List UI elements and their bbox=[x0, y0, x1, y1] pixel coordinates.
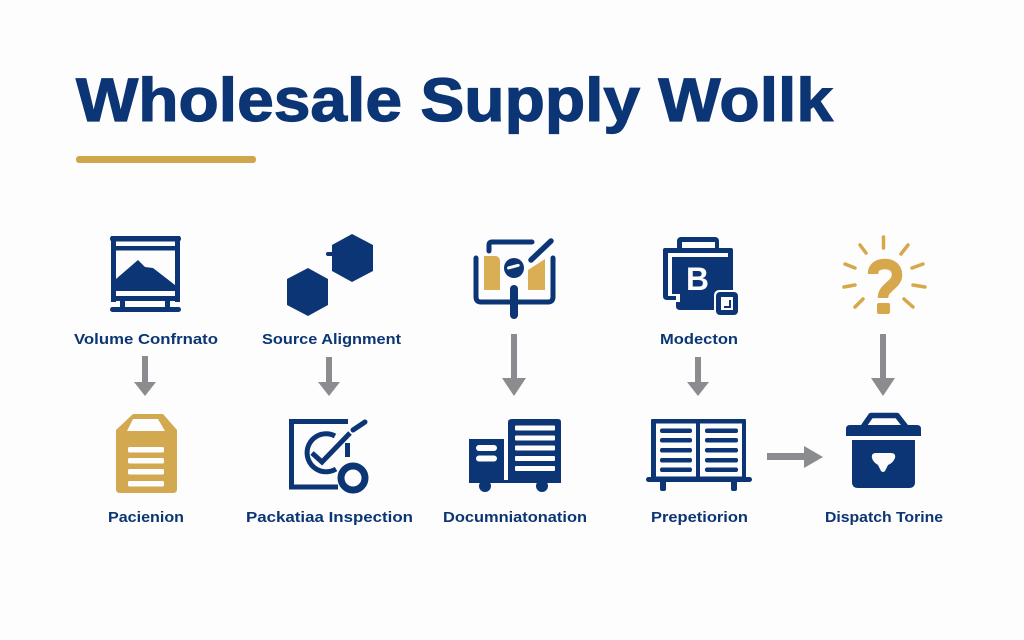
label: Packatiaa Inspection: Packatiaa Inspection bbox=[246, 509, 413, 526]
icon: B badge case: B bbox=[686, 261, 709, 297]
icon: inspection checklist bbox=[292, 422, 365, 490]
title underline bbox=[76, 156, 256, 163]
icon: framed mountain picture bbox=[110, 236, 181, 312]
icon: two hexagons bbox=[287, 234, 373, 316]
icon: gold document bbox=[116, 414, 177, 493]
arrow: Book to Documentation bbox=[502, 334, 526, 396]
arrow: Prepetiorion to Dispatch bbox=[767, 446, 823, 468]
icon: book with magnifier and pen bbox=[476, 241, 553, 315]
arrow: Volume to Pacienion bbox=[134, 356, 156, 396]
icon: B badge case bbox=[663, 237, 740, 317]
icon: dispatch tub bbox=[846, 416, 921, 488]
label: Pacienion: Pacienion bbox=[108, 509, 184, 526]
arrow: Modecton to Prepetiorion bbox=[687, 357, 709, 396]
label: Prepetiorion: Prepetiorion bbox=[651, 509, 748, 526]
icon: open book on shelf bbox=[646, 419, 752, 491]
icon: documentation truck bbox=[469, 419, 561, 492]
arrow: Question to Dispatch bbox=[871, 334, 895, 396]
label: Documniatonation: Documniatonation bbox=[443, 509, 587, 526]
label: Dispatch Torine: Dispatch Torine bbox=[825, 509, 943, 526]
arrow: Source to Packaging bbox=[318, 357, 340, 396]
title: Wholesale Supply Wollk bbox=[76, 66, 833, 134]
label: Volume Confrnato: Volume Confrnato bbox=[74, 331, 218, 348]
label: Modecton: Modecton bbox=[660, 331, 738, 348]
label: Source Alignment: Source Alignment bbox=[262, 331, 401, 348]
icon: question mark with rays bbox=[844, 237, 925, 314]
